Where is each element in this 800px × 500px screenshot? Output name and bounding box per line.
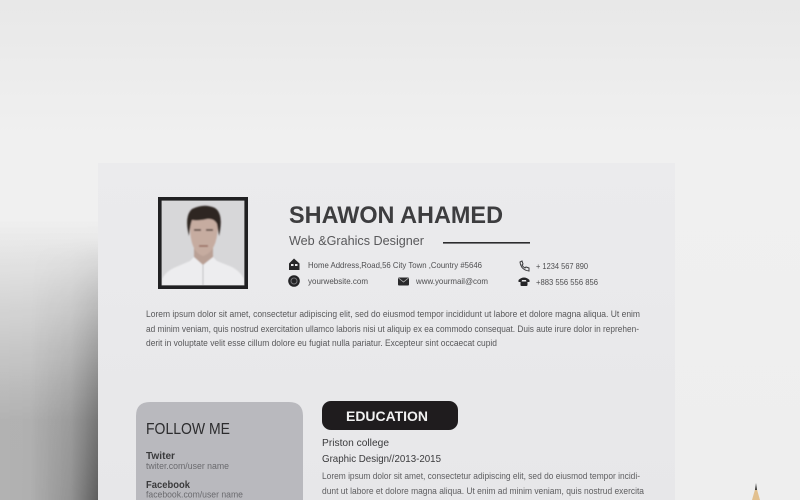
education details: Priston college bbox=[322, 437, 389, 449]
icon: home bbox=[289, 258, 300, 270]
address: Home Address,Road,56 City Town ,Country #5646 bbox=[308, 260, 482, 270]
phone number: + 1234 567 890 bbox=[536, 261, 588, 271]
profile photo frame bbox=[160, 199, 246, 287]
email: www.yourmail@com bbox=[415, 276, 488, 286]
icon: telephone bbox=[518, 278, 530, 286]
icon: mail bbox=[398, 278, 409, 286]
follow me heading: FOLLOW ME bbox=[146, 421, 230, 438]
intro paragraph: derit in voluptate velit esse cillum dolore eu fugiat nulla pariatur. Excepteur sint occaecat cupid bbox=[146, 338, 497, 348]
twitter: Twiter bbox=[146, 450, 175, 462]
education heading: EDUCATION bbox=[346, 408, 428, 424]
panel: follow me bbox=[136, 402, 303, 500]
panel: follow me: twiter.com/user name bbox=[146, 461, 229, 471]
fax number: +883 556 556 856 bbox=[536, 277, 598, 287]
education details bbox=[322, 437, 644, 496]
paper sheet bbox=[98, 163, 675, 500]
icon: globe bbox=[288, 275, 300, 287]
name: SHAWON AHAMED bbox=[289, 202, 503, 229]
education details: Lorem ipsum dolor sit amet, consectetur adipiscing elit, sed do eiusmod tempor incidi- bbox=[322, 471, 640, 481]
portrait photo bbox=[162, 206, 244, 286]
title rule bbox=[443, 242, 530, 244]
pencil bbox=[752, 483, 760, 500]
paper shadow bbox=[0, 241, 98, 500]
website: yourwebsite.com bbox=[308, 276, 368, 286]
job title: Web &Grahics Designer bbox=[289, 233, 425, 248]
icon: phone bbox=[520, 261, 529, 271]
panel: follow me: facebook.com/user name bbox=[146, 490, 243, 500]
intro paragraph: ad minim veniam, quis nostrud exercitation ullamco laboris nisi ut aliquip ex ea commodo consequat. Duis aute irure dolor in reprehen- bbox=[146, 324, 639, 334]
education heading bbox=[322, 401, 458, 430]
intro paragraph: Lorem ipsum dolor sit amet, consectetur adipiscing elit, sed do eiusmod tempor incididunt ut labore et dolore magna aliqua. Ut enim bbox=[146, 309, 640, 319]
education details: Graphic Design//2013-2015 bbox=[322, 453, 441, 465]
facebook: Facebook bbox=[146, 479, 190, 491]
intro paragraph bbox=[146, 309, 640, 348]
education details: dunt ut labore et dolore magna aliqua. Ut enim ad minim veniam, quis nostrud exercita bbox=[322, 486, 644, 496]
